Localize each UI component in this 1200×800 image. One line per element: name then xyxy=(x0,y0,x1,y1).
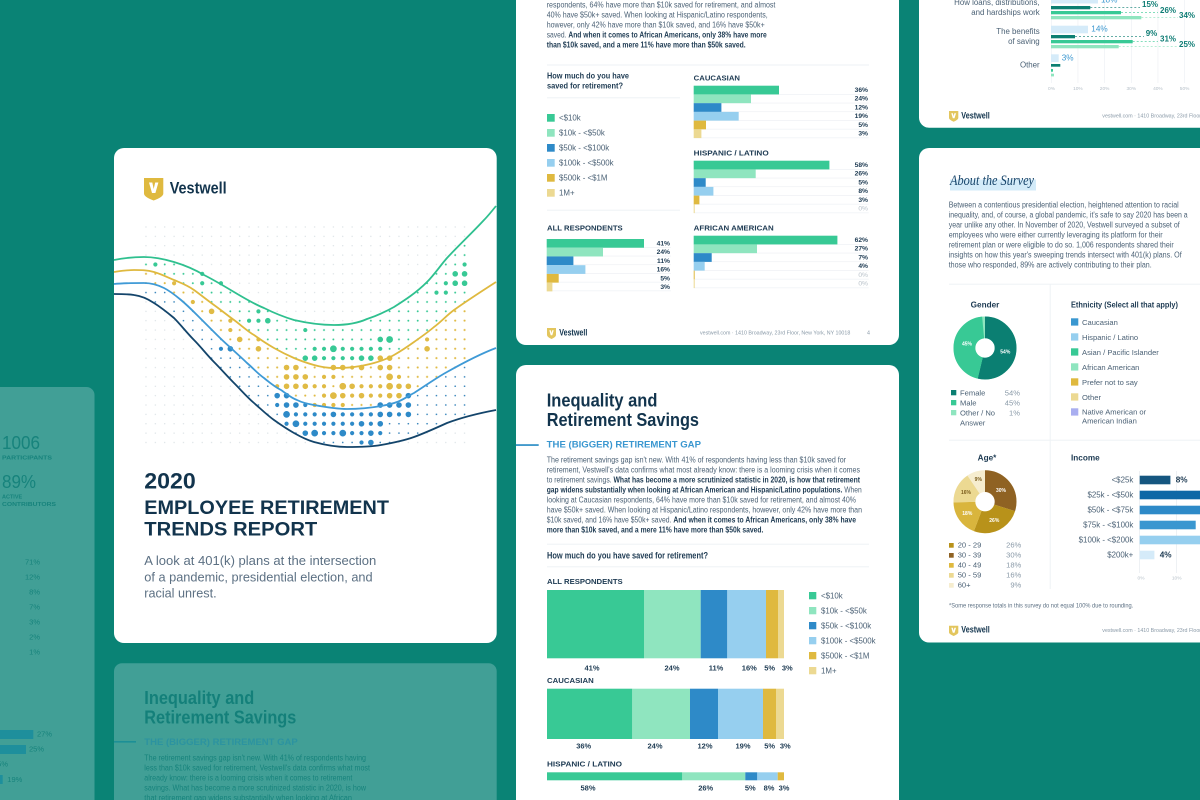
bars: other: 3% xyxy=(1062,53,1074,62)
faded percentages list: 8% xyxy=(29,587,40,596)
faded bar chart: 19% xyxy=(7,775,23,784)
faded percentages list: 3% xyxy=(29,617,40,626)
footer: Vestwell xyxy=(961,625,990,635)
faded bar chart: 27% xyxy=(37,730,52,739)
faded percentages list: 1% xyxy=(29,647,40,656)
paragraph: insights on how this year's sweeping trends intersect with 401(k) plans. Of xyxy=(949,250,1182,259)
chart: african american xyxy=(694,224,869,288)
stacked bar: caucasian: 24% xyxy=(647,741,663,750)
paragraph xyxy=(949,200,1188,269)
gender donut: 1% xyxy=(1009,409,1020,418)
legend: <$10k xyxy=(821,592,843,601)
paragraph: gap widens substantially when looking at African American and Hispanic/Latino populations. When xyxy=(547,486,862,495)
age donut: 40 - 49 xyxy=(958,561,981,570)
legend: $500k - <$1M xyxy=(559,174,607,183)
row labels: and hardships work xyxy=(971,8,1040,17)
stacked bar: caucasian: 19% xyxy=(735,741,751,750)
faded paragraph: savings. What has become a more scrutinized statistic in 2020, is how xyxy=(144,784,366,793)
panel: faded stats page xyxy=(0,387,94,800)
stacked bar: all respondents: 24% xyxy=(664,664,680,673)
ethnicity legend: American Indian xyxy=(1082,416,1137,425)
age donut: 9% xyxy=(1010,581,1022,590)
axis labels: 40% xyxy=(1153,86,1163,92)
ethnicity legend: Hispanic / Latino xyxy=(1082,333,1138,342)
cover title: EMPLOYEE RETIREMENT xyxy=(144,497,389,519)
age donut: Age* xyxy=(978,454,997,463)
cover title: 2020 xyxy=(144,469,196,494)
chart: caucasian: 3% xyxy=(858,131,868,138)
chart: african american: AFRICAN AMERICAN xyxy=(694,224,774,233)
age donut: 18% xyxy=(1006,561,1022,570)
chart: caucasian: 24% xyxy=(855,96,868,103)
cover subtitle: A look at 401(k) plans at the intersection xyxy=(144,553,376,568)
legend xyxy=(547,114,614,198)
chart: all respondents: 41% xyxy=(657,240,670,248)
section marker xyxy=(516,444,539,446)
income bar chart: 8% xyxy=(1176,476,1188,485)
chart: african american: 27% xyxy=(855,246,868,253)
chart: african american: 0% xyxy=(858,272,868,279)
paragraph: have $50k+ saved. When looking at Hispanic/Latino respondents, however, only 42% have more than xyxy=(547,506,862,515)
faded percentages list xyxy=(25,557,40,656)
title: Retirement Savings xyxy=(547,410,699,430)
panel: faded inequality page xyxy=(114,663,497,800)
paragraph: saved. And when it comes to African Americans, only 38% have more xyxy=(547,30,767,39)
faded percentages list: 2% xyxy=(29,632,40,641)
panel: report cover xyxy=(114,148,497,643)
income bar chart: $100k - <$200k xyxy=(1079,536,1133,544)
gender donut: Gender xyxy=(971,300,1000,309)
paragraph: retirement, Vestwell's data confirms what most already know: there is a looming crisis when it comes xyxy=(547,466,860,475)
chart: african american: 7% xyxy=(858,254,868,261)
paragraph: retirement plan or were eligible to do so. 1,006 respondents shared their xyxy=(949,240,1174,249)
panel: knowledge bar chart page xyxy=(919,0,1200,128)
title xyxy=(547,391,699,430)
income bar chart: 10% xyxy=(1172,575,1182,581)
dot matrix chart xyxy=(141,222,470,448)
legend: $500k - <$1M xyxy=(821,652,869,661)
stacked bar: caucasian xyxy=(547,676,791,750)
legend: 1M+ xyxy=(559,189,575,198)
chart: hispanic latino: 58% xyxy=(855,162,868,169)
chart: caucasian: 36% xyxy=(855,87,868,94)
chart: african american: 62% xyxy=(855,237,868,244)
ethnicity legend: Caucasian xyxy=(1082,318,1118,327)
age donut: 26% xyxy=(989,518,1000,524)
gender donut: Answer xyxy=(960,419,986,428)
gender donut: 45% xyxy=(962,342,973,348)
bars: benefits: 14% xyxy=(1091,24,1108,33)
bars: benefits: 31% xyxy=(1160,35,1176,44)
stacked bar: all respondents xyxy=(547,577,793,673)
chart: all respondents: ALL RESPONDENTS xyxy=(547,224,623,233)
stat: active contributors: CONTRIBUTORS xyxy=(2,502,56,508)
stacked bar: hispanic latino: 58% xyxy=(580,783,596,792)
gender donut: Other / No xyxy=(960,409,995,418)
income bar chart: $200k+ xyxy=(1107,550,1134,560)
gender donut: 45% xyxy=(1005,399,1020,408)
chart: caucasian: CAUCASIAN xyxy=(694,74,740,83)
axis labels: 20% xyxy=(1100,86,1110,92)
question heading xyxy=(547,71,629,91)
cover subtitle xyxy=(144,553,376,601)
faded percentages list: 7% xyxy=(29,602,40,611)
stacked bar: all respondents: 3% xyxy=(782,664,793,673)
chart: all respondents: 5% xyxy=(660,275,670,282)
paragraph: than $10k saved, and a mere 11% have more than $50k saved. xyxy=(547,40,746,49)
income bar chart: $25k - <$50k xyxy=(1087,490,1133,500)
legend: $10k - <$50k xyxy=(559,129,605,138)
ethnicity legend: Other xyxy=(1082,393,1101,402)
chart: caucasian xyxy=(694,74,869,138)
chart: hispanic latino: 26% xyxy=(855,171,868,178)
income bar chart: $50k - <$75k xyxy=(1087,506,1133,514)
faded percentages list: 71% xyxy=(25,557,40,566)
stacked bar: caucasian: 12% xyxy=(697,741,713,750)
paragraph: Between a contentious presidential election, heightened attention to racial xyxy=(949,200,1179,209)
curve lines xyxy=(114,206,496,447)
footer xyxy=(949,625,1200,636)
faded title: Retirement Savings xyxy=(144,707,296,727)
age donut: 30 - 39 xyxy=(958,551,981,560)
paragraph: year unlike any other. In November of 2020, Vestwell surveyed a subset of xyxy=(949,220,1180,229)
gender donut: Male xyxy=(960,399,976,408)
chart: all respondents: 16% xyxy=(657,267,670,274)
income bar chart: 0% xyxy=(1138,575,1145,581)
paragraph: looking at Caucasian respondents, 64% have more than $10k saved for retirement, and almost 40% xyxy=(547,496,856,505)
chart: all respondents: 11% xyxy=(657,258,670,265)
faded subheading: THE (BIGGER) RETIREMENT GAP xyxy=(144,737,298,747)
stacked bar: all respondents: 5% xyxy=(764,664,775,673)
age donut: 16% xyxy=(1006,571,1022,580)
stat: participants: PARTICIPANTS xyxy=(2,455,52,461)
paragraph: more than $10k saved, and a mere 11% have more than $50k saved. xyxy=(547,526,763,535)
faded bar chart xyxy=(0,730,52,784)
faded paragraph: The retirement savings gap isn't new. With 41% of respondents having xyxy=(144,754,366,763)
stacked bar: all respondents: 11% xyxy=(709,664,724,673)
paragraph: 40% have $50k+ saved. When looking at Hispanic/Latino respondents, xyxy=(547,10,768,19)
income bar chart: $75k - <$100k xyxy=(1083,520,1133,530)
faded bar chart: 25% xyxy=(29,745,44,754)
ethnicity legend xyxy=(1071,300,1178,425)
cover subtitle: of a pandemic, presidential election, and xyxy=(144,569,373,584)
legend: $100k - <$500k xyxy=(821,637,876,646)
gender donut: Female xyxy=(960,389,985,398)
legend: $100k - <$500k xyxy=(559,159,614,168)
stacked bar: hispanic latino: 26% xyxy=(698,783,714,792)
cover subtitle: racial unrest. xyxy=(144,586,217,601)
axis labels: 50% xyxy=(1180,86,1190,92)
faded paragraph xyxy=(144,754,371,800)
gender donut: 54% xyxy=(1005,389,1020,398)
axis labels: 30% xyxy=(1126,86,1137,92)
paragraph: respondents, 64% have more than $10k saved for retirement, and almost xyxy=(547,0,776,9)
age donut: 60+ xyxy=(958,581,971,590)
age donut: 30% xyxy=(996,488,1007,494)
paragraph: employees who were either currently leveraging its platform for their xyxy=(949,230,1163,239)
row labels: The benefits xyxy=(996,27,1040,36)
bars: loans xyxy=(1051,0,1195,20)
footer: 4 xyxy=(867,331,870,337)
panel: savings by group page xyxy=(516,0,899,345)
age donut: 30% xyxy=(1006,551,1022,560)
paragraph: $10k saved, and 16% have $50k+ saved. And when it comes to African Americans, only 38% have xyxy=(547,516,857,525)
stacked bar: hispanic latino: HISPANIC / LATINO xyxy=(547,760,622,769)
bars: benefits: 25% xyxy=(1179,40,1195,49)
stat: participants xyxy=(2,433,52,461)
legend: $50k - <$100k xyxy=(559,144,609,153)
faded section marker xyxy=(114,741,136,743)
paragraph: to retirement savings. What has become a more scrutinized statistic in 2020, is how that retirement xyxy=(547,476,860,485)
legend: <$10k xyxy=(559,114,581,123)
bars: other xyxy=(1051,53,1074,76)
stacked bar: caucasian: CAUCASIAN xyxy=(547,676,594,685)
footer: vestwell.com · 1410 Broadway, 23rd Floor, New York, NY 10018 xyxy=(700,331,850,337)
stat: active contributors: ACTIVE xyxy=(2,495,22,501)
stat: active contributors: 89% xyxy=(2,472,36,492)
row labels: of saving xyxy=(1008,37,1040,46)
bars: benefits xyxy=(1051,24,1195,49)
faded paragraph: already know: there is a looming crisis when it comes to retirement xyxy=(144,774,353,783)
paragraph xyxy=(547,456,862,535)
faded percentages list: 12% xyxy=(25,572,40,581)
cover title: TRENDS REPORT xyxy=(144,518,317,540)
bars: loans: 15% xyxy=(1142,0,1158,9)
chart: hispanic latino: 8% xyxy=(858,188,868,195)
gender donut: 54% xyxy=(1000,350,1011,356)
footnote: *Some response totals in this survey do not equal 100% due to rounding. xyxy=(949,603,1134,609)
stat: active contributors xyxy=(2,472,56,508)
chart: hispanic latino xyxy=(694,149,869,213)
income bar chart: <$25k xyxy=(1112,476,1133,484)
age donut: 26% xyxy=(1006,541,1022,550)
stacked bar: caucasian: 5% xyxy=(764,741,775,750)
stacked bar: all respondents: 41% xyxy=(584,664,600,673)
chart: african american: 4% xyxy=(858,263,868,270)
gridlines xyxy=(1051,0,1185,83)
stacked bar: caucasian: 3% xyxy=(780,741,791,750)
ethnicity legend: Asian / Pacific Islander xyxy=(1082,348,1159,357)
legend: $10k - <$50k xyxy=(821,607,867,616)
axis labels: 10% xyxy=(1073,86,1083,92)
age donut: 20 - 29 xyxy=(958,541,981,550)
stat: participants: 1006 xyxy=(2,433,40,453)
stacked bar: all respondents: ALL RESPONDENTS xyxy=(547,577,623,586)
title: Inequality and xyxy=(547,391,657,411)
panel: inequality and retirement savings page xyxy=(516,365,899,800)
ethnicity legend: Native American or xyxy=(1082,408,1147,417)
stacked bar: all respondents: 16% xyxy=(742,664,757,673)
income bar chart: Income xyxy=(1071,454,1100,463)
legend: $50k - <$100k xyxy=(821,622,871,631)
chart: caucasian: 19% xyxy=(855,113,868,120)
gender donut xyxy=(951,300,1020,428)
faded paragraph: less than $10k saved for retirement, Vestwell's data confirms what most xyxy=(144,764,371,773)
footer xyxy=(949,111,1200,122)
chart: hispanic latino: HISPANIC / LATINO xyxy=(694,149,769,158)
legend xyxy=(809,592,876,676)
faded title: Inequality and xyxy=(144,688,254,708)
bars: loans: 26% xyxy=(1160,6,1176,15)
stacked bar: hispanic latino: 3% xyxy=(779,783,790,792)
stacked bar: hispanic latino xyxy=(547,760,790,792)
axis labels xyxy=(1048,86,1190,92)
chart: african american: 0% xyxy=(858,281,868,288)
chart: all respondents xyxy=(547,224,671,291)
ethnicity legend: Prefer not to say xyxy=(1082,378,1138,387)
question heading: How much do you have xyxy=(547,71,629,81)
paragraph xyxy=(547,0,776,49)
row labels: Other xyxy=(1020,61,1040,70)
axis labels: 0% xyxy=(1048,86,1056,92)
subheading: THE (BIGGER) RETIREMENT GAP xyxy=(547,440,701,450)
chart: all respondents: 24% xyxy=(657,249,670,256)
bars: benefits: 9% xyxy=(1146,29,1157,38)
faded title xyxy=(144,688,296,727)
footer: Vestwell xyxy=(961,111,990,121)
stacked bar: hispanic latino: 8% xyxy=(764,783,775,792)
age donut xyxy=(949,454,1022,590)
stacked bar: hispanic latino: 5% xyxy=(745,783,756,792)
income bar chart: 4% xyxy=(1160,551,1172,560)
footer: Vestwell xyxy=(559,328,587,338)
chart: hispanic latino: 5% xyxy=(858,179,868,186)
chart: hispanic latino: 3% xyxy=(858,197,868,204)
chart: caucasian: 5% xyxy=(858,122,868,129)
bars: loans: 34% xyxy=(1179,11,1195,20)
chart: all respondents: 3% xyxy=(660,284,670,291)
chart: caucasian: 12% xyxy=(855,104,868,111)
age donut: 16% xyxy=(961,490,972,496)
income bar chart xyxy=(1071,454,1200,581)
paragraph: however, only 42% have more than $10k saved, and 16% have $50k+ xyxy=(547,20,765,29)
row labels xyxy=(954,0,1040,70)
title: about the survey: About the Survey xyxy=(949,173,1034,189)
footer xyxy=(547,328,870,339)
paragraph: The retirement savings gap isn't new. With 41% of respondents having less than $10k saved for xyxy=(547,456,846,465)
ethnicity legend: Ethnicity (Select all that apply) xyxy=(1071,300,1178,309)
chart: hispanic latino: 0% xyxy=(858,206,868,213)
paragraph: those who responded, 89% are actively contributing to their plan. xyxy=(949,260,1152,269)
question: How much do you have saved for retirement? xyxy=(547,551,708,561)
ethnicity legend: African American xyxy=(1082,363,1139,372)
cover title xyxy=(144,469,389,540)
age donut: 50 - 59 xyxy=(958,571,981,580)
logo: Vestwell xyxy=(144,178,227,200)
logo: Vestwell: Vestwell xyxy=(170,180,227,198)
age donut: 18% xyxy=(962,511,973,517)
stacked bar: caucasian: 36% xyxy=(576,741,592,750)
question heading: saved for retirement? xyxy=(547,81,623,91)
legend: 1M+ xyxy=(821,667,837,676)
panel: about the survey page xyxy=(919,148,1200,642)
age donut: 9% xyxy=(975,477,982,483)
